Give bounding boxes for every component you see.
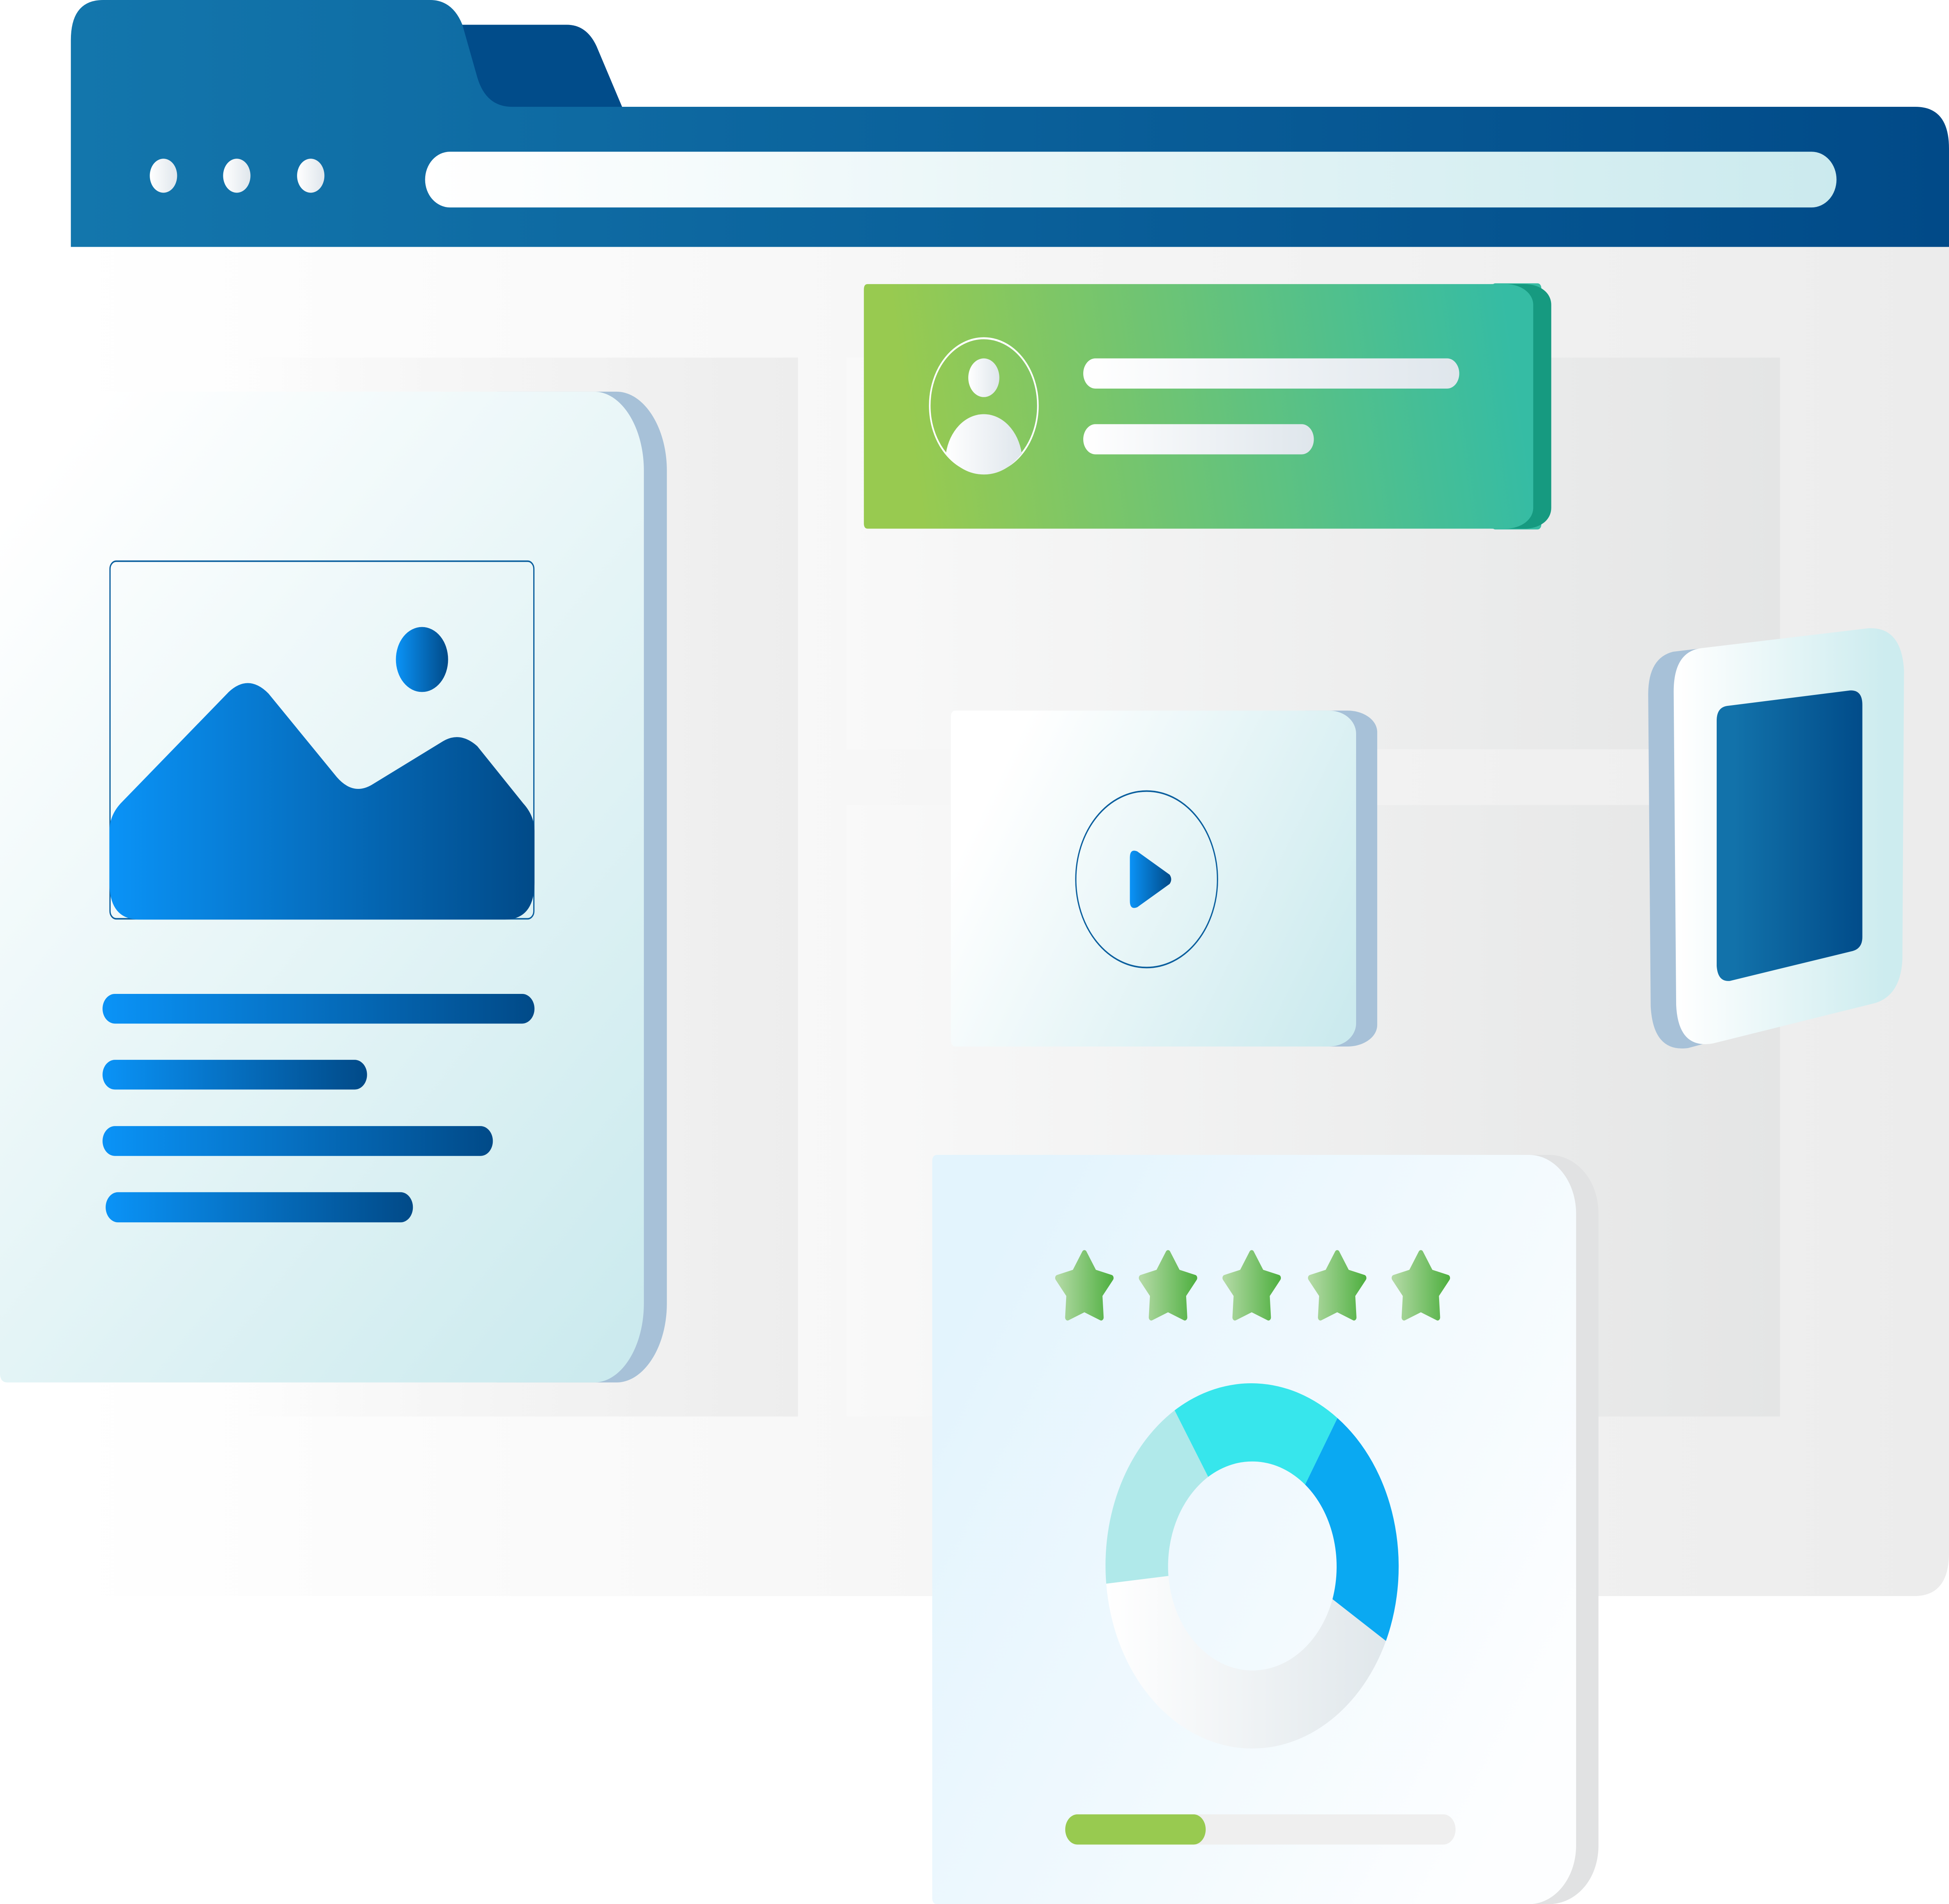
icon: user avatar — [930, 338, 1038, 474]
card back edge — [1492, 1155, 1599, 1904]
avatar body — [946, 414, 1022, 474]
panel: image article card — [0, 392, 667, 1382]
card back edge — [497, 392, 667, 1382]
browser header — [71, 0, 1949, 247]
donut segment: pale teal — [1105, 1410, 1208, 1584]
window body — [71, 232, 1949, 1596]
background panel left — [236, 358, 798, 1416]
panel: rating card — [932, 1155, 1599, 1904]
tablet face — [1674, 628, 1904, 1044]
background panel bottom right — [847, 805, 1780, 1416]
donut segment: cyan — [1174, 1383, 1337, 1485]
card face — [951, 711, 1356, 1047]
panel: video card — [951, 711, 1377, 1047]
avatar head — [968, 358, 999, 397]
icon: play triangle — [1130, 851, 1171, 908]
background panel top right — [847, 358, 1780, 749]
text line placeholders — [103, 994, 534, 1222]
address bar — [425, 152, 1836, 207]
donut chart — [1105, 1383, 1399, 1748]
text line placeholders — [1083, 358, 1459, 454]
card back edge — [1305, 711, 1377, 1047]
play ring — [1076, 791, 1217, 967]
progress fill — [1065, 1814, 1206, 1844]
icon: mountains — [110, 683, 534, 919]
card face — [864, 284, 1533, 529]
donut segment: blue — [1305, 1418, 1399, 1641]
back tab — [447, 25, 623, 108]
card teal edge — [1492, 283, 1541, 529]
card face — [0, 392, 644, 1382]
window control dots — [150, 159, 324, 193]
progress track — [1065, 1814, 1456, 1844]
donut segment: light gray — [1106, 1576, 1386, 1748]
tablet back edge — [1648, 648, 1705, 1048]
icon: sun — [396, 627, 448, 692]
avatar ring — [930, 338, 1038, 473]
progress bar — [1065, 1814, 1456, 1844]
image frame — [110, 561, 534, 919]
panel: profile card — [864, 283, 1551, 529]
panel: tablet — [1648, 628, 1904, 1048]
icon: five stars — [1058, 1253, 1448, 1317]
card face — [932, 1155, 1576, 1904]
card back edge — [1492, 284, 1551, 529]
tablet screen — [1717, 690, 1862, 981]
